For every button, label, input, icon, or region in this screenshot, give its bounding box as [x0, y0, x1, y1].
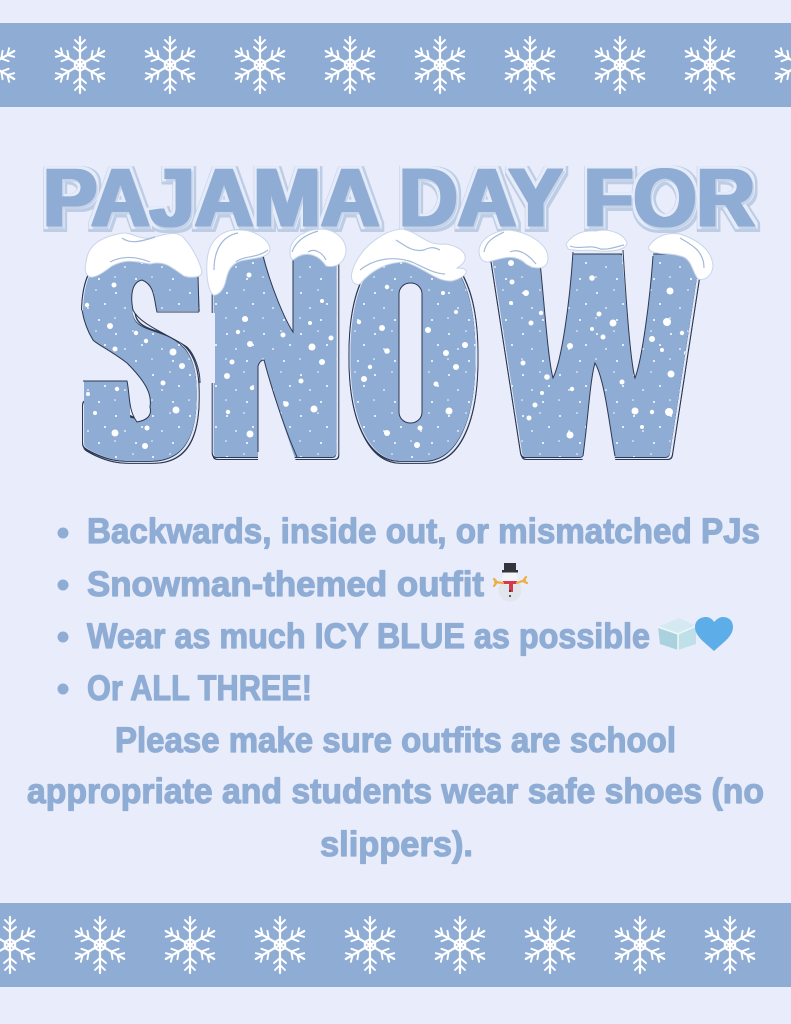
headline: SNOW with snow dots and caps: S: [83, 202, 197, 522]
letter body patches: [84, 258, 433, 428]
note text: Please make sure outfits are school: [115, 721, 676, 760]
snow cap shading: [110, 231, 704, 274]
bullet list: [58, 512, 760, 708]
icon: blue heart emoji: [695, 617, 733, 651]
bottom snowflake banner: [0, 903, 791, 987]
bullet 3: Wear as much ICY BLUE as possible: [87, 617, 650, 656]
note text: [27, 721, 764, 864]
top snowflake banner: [0, 23, 791, 107]
snow dots on letters: [84, 260, 692, 458]
bullet 4: Or ALL THREE!: [87, 669, 312, 708]
headline: SNOW with snow dots and caps: W: [497, 201, 695, 521]
headline: SNOW with snow dots and caps: [81, 228, 714, 464]
bullet 1: Backwards, inside out, or mismatched PJs: [87, 512, 760, 551]
icon: snowman emoji: [494, 563, 527, 602]
letter counters and notches: [70, 243, 654, 464]
icon: ice cube emoji: [658, 618, 696, 650]
title: Pajama Day for: PAJAMA DAY FOR: [43, 151, 755, 244]
snow caps: [85, 229, 713, 295]
headline: SNOW with snow dots and caps: O: [355, 202, 471, 522]
headline: SNOW with snow dots and caps: N: [211, 201, 339, 521]
note text: slippers).: [320, 825, 473, 864]
letter counter sketch lines: [82, 250, 653, 457]
note text: appropriate and students wear safe shoes (no: [27, 772, 764, 811]
bullet 2: Snowman-themed outfit: [87, 565, 484, 604]
